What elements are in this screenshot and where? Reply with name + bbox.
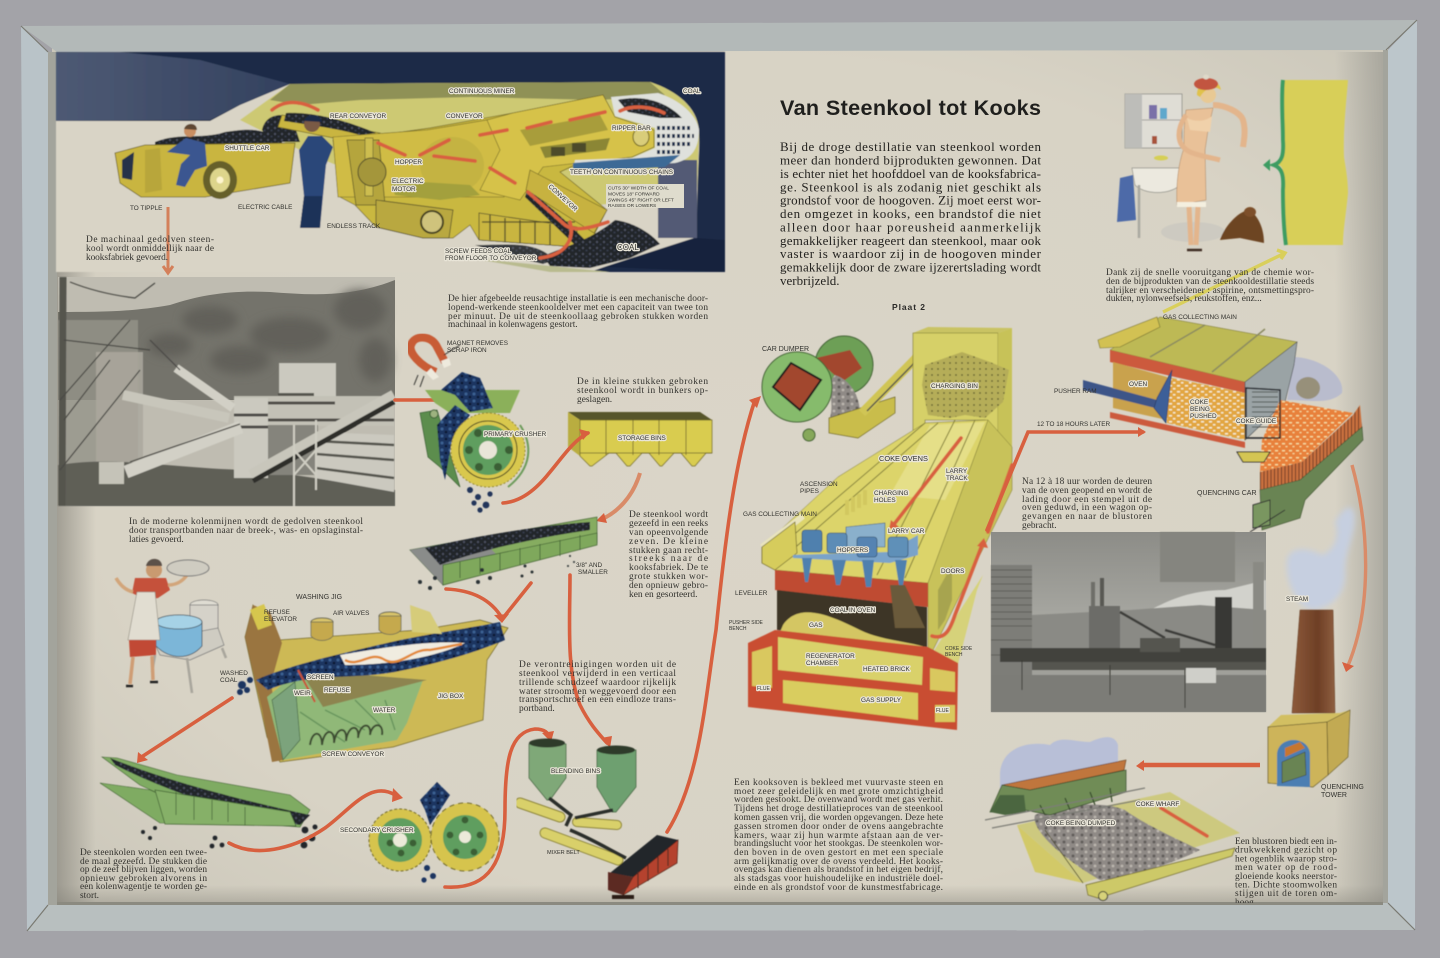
oven cross-section illustration: PUSHED (1190, 413, 1217, 420)
arrow: screens to washing jig (446, 583, 531, 623)
coke ovens illustration: CHARGING (874, 490, 908, 497)
oven cross-section illustration: QUENCHING CAR (1197, 490, 1257, 497)
coke ovens illustration: COAL IN OVEN (830, 607, 876, 614)
oven section (775, 570, 928, 607)
washing jig illustration: REFUSE (324, 687, 350, 694)
coke ovens illustration: ASCENSION (800, 481, 838, 488)
washing jig illustration: REFUSE (264, 609, 290, 616)
intro text: is echter niet het hoofddoel van de kooksfabrica- (780, 166, 1041, 181)
text block: impurities: water stroomt en weggevoerd door een (519, 687, 676, 697)
quenching tower illustration: QUENCHING (1321, 784, 1364, 791)
miner labels: ELECTRIC (392, 178, 424, 185)
text block: quenching tower (cut off at frame) (1235, 837, 1337, 908)
arrow: secondary crusher to blending bins (445, 729, 554, 887)
primary crusher illustration (411, 338, 547, 513)
miner labels: CONVEYOR (547, 183, 579, 213)
text block: coke oven description: Tijdens het droge destillatieproces van de steenkool (734, 804, 943, 814)
text block: impurities: transportschroef en een eindloze trans- (519, 694, 676, 705)
miner labels: SWINGS 45° RIGHT OR LEFT (608, 198, 674, 204)
car dumper illustration: CAR DUMPER (762, 346, 809, 353)
intro text: gemakkelijk door de zware ijzerertslading wordt (780, 260, 1041, 274)
text block: quenching tower (cut off at frame): drukwekkend gezicht op (1235, 846, 1337, 856)
text block: quenching tower (cut off at frame): hoog. (1235, 898, 1256, 908)
vibrating screen illustration: 3/8" AND (576, 562, 602, 569)
text block: second sieving: de maal gezeefd. De stukken die (80, 856, 207, 867)
miner labels: CONTINUOUS MINER (449, 88, 515, 95)
miner labels: TEETH ON CONTINUOUS CHAINS (570, 169, 673, 176)
text block: by-products: dukten, nylonweefsels, reukstoffen, enz... (1106, 293, 1262, 304)
text block: screening: van opeenvolgende (629, 528, 708, 538)
text block: coke oven description: worden gestookt. De ovenwand wordt met gas verhit. (734, 795, 943, 805)
second screen illustration (100, 757, 318, 848)
blending bins illustration: BLENDING BINS (551, 768, 600, 775)
coke wharf illustration: COKE BEING DUMPED (1046, 820, 1116, 827)
coke ovens illustration: FLUE (757, 686, 770, 692)
oven cross-section illustration: OVEN (1129, 381, 1147, 388)
coke ovens illustration: BENCH (945, 652, 963, 658)
illustration: woman in bathroom (1117, 74, 1264, 250)
seated driver (167, 138, 207, 187)
coke ovens illustration: HOLES (874, 497, 896, 504)
text block: coke oven description: einde en als grondstof voor de kunstmestfabricage. (734, 882, 943, 893)
miner labels: CONVEYOR (446, 113, 483, 120)
coke ovens illustration: HOPPERS (837, 547, 868, 554)
text block: second sieving: opnieuw gebroken alvorens in (80, 874, 207, 884)
text block: coke oven description: moet zeer geleidelijk en met grote omzichtigheid (734, 787, 943, 797)
washing jig illustration: SCREW CONVEYOR (322, 751, 385, 758)
text block: quenching tower (cut off at frame): men water op de rood- (1235, 863, 1337, 873)
text block: coke oven description: Een kooksoven is bekleed met vuurvaste steen en (734, 778, 943, 788)
intro text: den omgezet in kooks, een brandstof die niet (780, 206, 1041, 221)
text block: bunkers: geslagen. (577, 395, 612, 405)
washing jig illustration: WASHED (220, 670, 248, 677)
text block: continuous miner description: per minuut. De uit de steenkoollaag gebroken stukken worden (448, 312, 708, 322)
plate label: Plaat 2 (892, 302, 925, 312)
coke ovens illustration: COKE SIDE (945, 646, 973, 652)
text block: coke oven description: den boven in de oven gestort en met een speciale (734, 848, 943, 858)
flow arrows (378, 107, 664, 258)
miner labels: HOPPER (395, 159, 422, 166)
coke ovens illustration: GAS SUPPLY (861, 697, 902, 704)
miner labels: SHUTTLE CAR (225, 145, 270, 152)
text block: coke oven description (734, 778, 943, 893)
oven battery top (762, 420, 988, 583)
text block: coke oven description: als stadsgas voor huishoudelijke en industriële doel- (734, 874, 943, 884)
text block: quenching tower (cut off at frame): het ogenblik waarop stro- (1235, 854, 1337, 864)
coke ovens illustration: LARRY (946, 468, 968, 475)
photo: coke plant (991, 532, 1266, 712)
miner labels: CUTS 30" WIDTH OF COAL (608, 186, 669, 192)
text block: impurities: De verontreinigingen worden uit de (519, 660, 676, 670)
blending bins illustration (520, 738, 678, 899)
text block: screening: zeven. De kleine (629, 537, 708, 547)
standing man (299, 136, 333, 228)
text block: coke pushing: oven geduwd, in een wagon op- (1022, 503, 1152, 513)
miner labels: RIPPER BAR (612, 125, 651, 132)
text block: screening: streeks naar de (629, 554, 708, 564)
text block: by-products: den de bijprodukten van de steenkooldestillatie steeds (1106, 277, 1314, 287)
primary crusher illustration: MAGNET REMOVES (447, 340, 508, 347)
boom (480, 95, 654, 200)
arrow: bins to screen (596, 473, 640, 523)
arrow: second screen to secondary crusher (229, 788, 403, 850)
intro text: grondstof voor de hoogoven. Zij moet eerst wor- (780, 193, 1041, 208)
text block: impurities: steenkool verwijderd in een verticaal (519, 669, 676, 679)
coke ovens illustration (729, 327, 1012, 730)
coke ovens illustration: DOORS (941, 568, 964, 575)
text block: impurities: portband. (519, 704, 555, 714)
text block: by-products: talrijker en verscheidener : aspirine, ontsmettingspro- (1106, 286, 1314, 296)
blending bins illustration: MIXER BELT (547, 850, 580, 856)
storage bins illustration (568, 412, 712, 466)
miner labels: SCREW FEEDS COAL (445, 248, 511, 255)
text block: coke oven description: gassen stromen door onder de ovens aangebrachte (734, 822, 943, 832)
coke ovens illustration: LEVELLER (735, 590, 768, 597)
storage bins illustration: STORAGE BINS (618, 435, 666, 442)
coke ovens illustration: BENCH (729, 626, 747, 632)
oven cross-section illustration: COKE GUIDE (1236, 418, 1276, 425)
text block: coke pushing (1022, 477, 1152, 531)
secondary crusher illustration: SECONDARY CRUSHER (340, 827, 414, 834)
washing jig illustration: COAL (220, 677, 238, 684)
coke ovens illustration: PIPES (800, 488, 819, 495)
text block: coke pushing: lading door een stempel uit de (1022, 495, 1152, 505)
miner labels: COAL (683, 88, 701, 95)
arrow: photo to crusher (395, 398, 438, 402)
text block: continuous miner description: machinaal in kolenwagens gestort. (448, 320, 578, 330)
miner labels: FROM FLOOR TO CONVEYOR (445, 255, 537, 262)
arrow: small coal to blending bins (569, 575, 612, 748)
cutter head (573, 93, 699, 170)
washing jig illustration: ELEVATOR (264, 616, 297, 623)
text block: second sieving: stort. (80, 891, 99, 901)
miner labels: MOVES 18" FORWARD (608, 192, 660, 198)
quenching tower illustration: STEAM (1286, 596, 1308, 603)
text block: screening: den opnieuw gebro- (629, 581, 708, 591)
primary crusher illustration: SCRAP IRON (447, 347, 487, 354)
oven cross-section illustration: BEING (1190, 406, 1210, 413)
quenching tower illustration (1268, 507, 1364, 799)
coke ovens illustration: CHARGING BIN (931, 383, 978, 390)
text block: bunkers: steenkool wordt in bunkers op- (577, 386, 708, 396)
shuttle car (155, 130, 282, 150)
coke ovens illustration: COKE OVENS (879, 454, 928, 463)
arrow: hopper car to car dumper (667, 396, 761, 832)
quenching tower illustration: TOWER (1321, 792, 1347, 799)
intro text: gemakkelijker reageert dan steenkool, maar ook (780, 233, 1042, 248)
arrow: tower to wharf (1136, 760, 1260, 771)
text block: coal mine caption: door transportbanden naar de breek-, was- en opslaginstal- (129, 526, 363, 536)
car dumper illustration (762, 336, 964, 441)
machine silhouette (333, 95, 654, 247)
panel: by-products yellow block (1263, 80, 1348, 245)
miner labels: COAL (617, 243, 639, 252)
text block: coke pushing: Na 12 à 18 uur worden de deuren (1022, 477, 1152, 487)
text block: quenching tower (cut off at frame): ten. Dichte stoomwolken (1235, 880, 1337, 890)
text block: bunkers: De in kleine stukken gebroken (577, 377, 708, 387)
text block: second sieving: op de zeef blijven liggen, worden (80, 864, 207, 875)
intro text: meer dan honderd bijprodukten gewonnen. Dat (780, 152, 1041, 168)
washing jig illustration: AIR VALVES (333, 610, 369, 617)
intro text: vaster is waardoor zij in de hoogoven minder (780, 246, 1042, 261)
rear conveyor (278, 115, 380, 143)
text block: quenching tower (cut off at frame): stijgen uit de toren om- (1235, 889, 1337, 899)
text block: impurities (519, 660, 676, 714)
oven cross-section illustration: 12 TO 18 HOURS LATER (1037, 421, 1111, 428)
vibrating screen illustration: SMALLER (578, 569, 608, 576)
text block: screening (629, 510, 708, 600)
text block: coke pushing: gevangen en naar de blustoren (1022, 512, 1152, 522)
text block: quenching tower (cut off at frame): Een blustoren biedt een in- (1235, 837, 1337, 847)
miner labels: ENDLESS TRACK (327, 223, 381, 230)
arrow: quenching car to tower (1342, 465, 1366, 672)
miner labels: REAR CONVEYOR (330, 113, 386, 120)
coke ovens illustration: GAS COLLECTING MAIN (743, 511, 817, 518)
coke ovens illustration: PUSHER SIDE (729, 620, 764, 626)
flow arrows (895, 438, 961, 523)
text block: screening: ken en gesorteerd. (629, 590, 697, 600)
text block: coke oven description: kamers, waar zij hun warmte afstaan aan de ver- (734, 830, 943, 841)
text block: bunkers (577, 377, 708, 405)
primary crusher illustration: PRIMARY CRUSHER (484, 431, 547, 438)
washing jig illustration: WATER (373, 707, 396, 714)
text block: coal mine caption: laties gevoerd. (129, 535, 184, 545)
panel: continuous miner illustration (56, 52, 725, 272)
intro text (780, 139, 1042, 288)
machine body (333, 120, 513, 197)
oven cross-section illustration: GAS COLLECTING MAIN (1163, 314, 1237, 321)
text block: coke pushing: van de oven geopend en wordt de (1022, 486, 1152, 496)
coke ovens illustration: HEATED BRICK (863, 666, 910, 673)
coke ovens illustration: TRACK (946, 475, 968, 482)
miner labels (130, 88, 701, 262)
text block: coke oven description: arm gelijkmatig over de ovens verdeeld. Het kooks- (734, 857, 943, 867)
text block: coke oven description: ovengas kan dienen als brandstof in het eigen bedrijf, (734, 864, 943, 875)
text block: continuous miner description: De hier afgebeelde reusachtige installatie is een mechanische door- (448, 293, 708, 304)
intro text: Bij de droge destillatie van steenkool worden (780, 139, 1042, 154)
intro text: verbrijzeld. (780, 273, 840, 288)
text block: quenching tower (cut off at frame): gloeiende kooks neerstor- (1235, 872, 1337, 882)
photo: coal mine plant (58, 277, 395, 506)
text block: screening: gezeefd in een reeks (629, 518, 708, 529)
text block: continuous miner description (448, 293, 708, 330)
vibrating screen illustration (410, 517, 608, 590)
text block: mined coal: kooksfabriek gevoerd. (86, 252, 168, 263)
washing jig illustration: SCREEN (307, 674, 334, 681)
text block: second sieving: De steenkolen worden een twee- (80, 848, 207, 858)
text block: by-products: Dank zij de snelle vooruitgang van de chemie wor- (1106, 268, 1314, 278)
miner labels: RAISES OR LOWERS (608, 203, 656, 209)
conveyor arm (526, 170, 607, 233)
intro text: ge. Steenkool is als zodanig niet geschikt als (780, 179, 1041, 194)
intro text: alleen door haar poreusheid aanmerkelijk (780, 220, 1042, 234)
text block: second sieving: een kolenwagentje te worden ge- (80, 882, 207, 892)
text block: second sieving (80, 848, 207, 901)
text block: coal mine caption (129, 517, 363, 545)
text block: screening: grote stukken wor- (629, 572, 708, 582)
arrow: to tipple (163, 207, 173, 273)
arrow: crusher to bins (503, 429, 590, 503)
washing jig illustration (220, 594, 508, 762)
secondary crusher illustration (340, 782, 499, 883)
oven cross-section illustration: COKE (1190, 399, 1208, 406)
miner labels: TO TIPPLE (130, 205, 162, 212)
illustration: woman with washing machine (116, 559, 226, 693)
washing jig illustration: WASHING JIG (296, 594, 342, 601)
coke ovens illustration: REGENERATOR (806, 653, 855, 660)
text block: coke pushing: gebracht. (1022, 521, 1057, 531)
title: Van Steenkool tot Kooks (780, 95, 1041, 120)
coke ovens illustration: CHAMBER (806, 660, 838, 667)
text block: screening: kooksfabriek. De te (629, 562, 708, 573)
larry car (793, 535, 918, 563)
hopper car (610, 835, 678, 877)
text block: coke oven description: komen gassen vrij, die worden opgevangen. Deze hete (734, 813, 943, 823)
coke ovens illustration: GAS (809, 622, 822, 629)
text block: mined coal: De machinaal gedolven steen- (86, 235, 214, 245)
text block: screening: De steenkool wordt (629, 510, 708, 520)
miner labels: MOTOR (392, 186, 416, 193)
arrow: oven to coke pushing (987, 427, 1146, 530)
washing jig illustration: JIG BOX (438, 693, 464, 700)
text block: coke oven description: brandingslucht voor het stookgas. De steenkolen wor- (734, 839, 943, 849)
oven cross-section illustration (1037, 314, 1363, 532)
text block: by-products (1106, 268, 1314, 304)
washing jig illustration: WEIR (294, 690, 311, 697)
text block: screening: stukken gaan recht- (629, 546, 708, 556)
text block: mined coal: kool wordt onmiddellijk naar de (86, 244, 214, 254)
coke ovens illustration: FLUE (936, 708, 949, 714)
coke wharf illustration (985, 737, 1240, 900)
endless tracks (376, 200, 453, 238)
text block: coal mine caption: In de moderne kolenmijnen wordt de gedolven steenkool (129, 517, 363, 527)
oven cross-section illustration: PUSHER RAM (1054, 388, 1097, 395)
arrow: washed coal to second screen (137, 698, 232, 763)
text block: mined coal (86, 235, 214, 263)
arrow: gas to by-products (1163, 250, 1285, 312)
miner labels: ELECTRIC CABLE (238, 204, 292, 211)
text block: continuous miner description: lopend-werkende steenkooldelver met een capaciteit van twee ton (448, 303, 708, 313)
text block: impurities: trillende schudzeef waardoor rijkelijk (519, 677, 676, 688)
coke wharf illustration: COKE WHARF (1136, 801, 1179, 808)
coke ovens illustration: LARRY CAR (888, 528, 925, 535)
